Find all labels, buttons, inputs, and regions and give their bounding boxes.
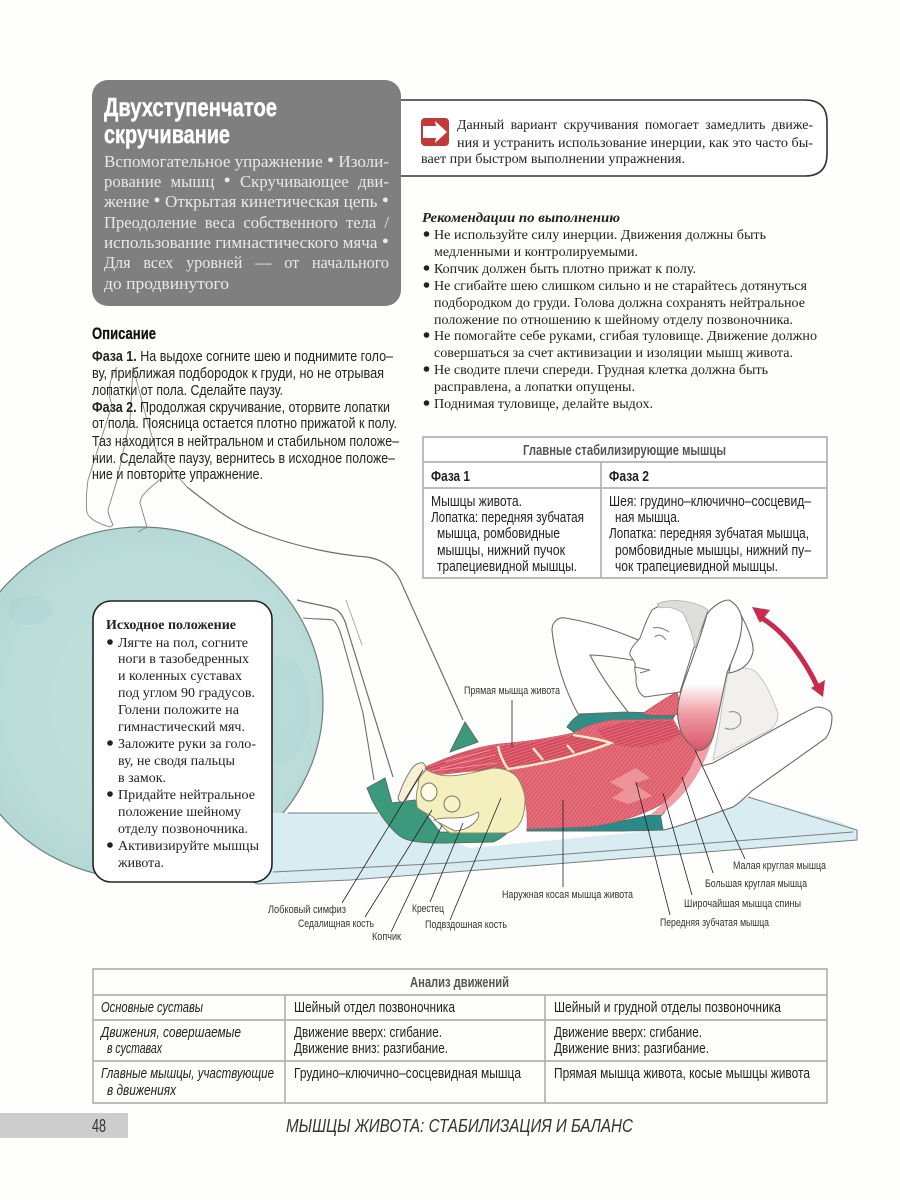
panel: exercise header: до продвинутого: [104, 274, 229, 293]
table: main stabilizing muscles: Лопатка: передняя зубчатая: [431, 509, 584, 526]
raised near arm: [678, 600, 753, 750]
anatomy labels: Копчик: [372, 931, 401, 943]
table: movement analysis: в движениях: [107, 1082, 176, 1099]
table: movement analysis: Прямая мышца живота, косые мышцы живота: [554, 1065, 811, 1082]
callout: tempo note: [401, 100, 827, 176]
anatomy labels: [268, 685, 827, 943]
exercise mat: [250, 797, 857, 884]
callout: tempo note: вает при быстром выполнении упражнения.: [421, 152, 685, 167]
table: main stabilizing muscles: Фаза 1: [431, 468, 470, 485]
description section: ву, приближая подбородок к груди, но не отрывая: [92, 365, 384, 382]
anatomy labels: Крестец: [412, 903, 445, 915]
execution recommendations: Не используйте силу инерции. Движения должны быть: [434, 228, 766, 243]
lower arm and resting head: [658, 668, 832, 830]
table: main stabilizing muscles: мышцы, нижний пучок: [437, 542, 565, 559]
description section: [92, 324, 400, 483]
torso muscles: [423, 719, 713, 829]
table: movement analysis: в суставах: [107, 1040, 162, 1057]
table: main stabilizing muscles: ная мышца.: [615, 509, 680, 526]
callout: starting position: Заложите руки за голо-: [118, 737, 256, 752]
gymnastic ball: [0, 527, 323, 879]
page number tab: 48: [92, 1116, 106, 1136]
description section: лопатки от пола. Сделайте паузу.: [92, 382, 283, 399]
description section: от пола. Поясница остается плотно прижатой к полу.: [92, 415, 397, 432]
anatomy labels: Прямая мышца живота: [464, 685, 561, 697]
table: movement analysis: Движение вниз: разгибание.: [554, 1040, 709, 1057]
table: movement analysis: [93, 969, 827, 1103]
execution recommendations: Не сводите плечи спереди. Грудная клетка должна быть: [434, 363, 768, 378]
callout: starting position: Придайте нейтральное: [118, 788, 255, 803]
callout: starting position: Исходное положение: [106, 618, 236, 633]
panel: exercise header: скручивание: [104, 119, 230, 149]
table: main stabilizing muscles: Фаза 2: [609, 468, 649, 485]
panel: exercise header: жение • Открытая кинетическая цепь •: [103, 190, 389, 212]
far arm behind head: [552, 618, 638, 714]
table: movement analysis: Движения, совершаемые: [99, 1024, 241, 1041]
callout: starting position: ву, не сводя пальцы: [118, 754, 236, 769]
panel: exercise header: использование гимнастического мяча •: [104, 231, 389, 253]
table: movement analysis: Грудино–ключично–сосцевидная мышца: [294, 1065, 522, 1082]
description section: Описание: [92, 324, 156, 343]
execution recommendations: подбородком до груди. Голова должна сохранять нейтральное: [434, 296, 805, 311]
panel: exercise header: Двухступенчатое: [104, 92, 277, 122]
callout: starting position: и коленных суставах: [118, 669, 242, 684]
anatomy labels: Большая круглая мышца: [705, 878, 808, 890]
table: movement analysis: Шейный и грудной отделы позвоночника: [554, 999, 782, 1016]
face and hair: [630, 601, 708, 697]
execution recommendations: Копчик должен быть плотно прижат к полу.: [434, 262, 696, 277]
callout: tempo note: ния и устранить использование инерции, как это часто бы-: [457, 136, 813, 151]
red movement arrow: [752, 607, 825, 697]
panel: exercise header: Для всех уровней — от начального: [104, 253, 389, 272]
table: main stabilizing muscles: трапециевидной мышцы.: [437, 558, 577, 575]
callout: starting position: ноги в тазобедренных: [118, 652, 249, 667]
anatomy leader lines: [342, 700, 745, 932]
callout: starting position: живота.: [117, 856, 164, 871]
shorts: [367, 712, 675, 843]
anatomy labels: Подвздошная кость: [425, 919, 507, 931]
neck muscle: [642, 692, 682, 716]
pelvis bones: [416, 768, 525, 833]
callout: starting position: Активизируйте мышцы: [118, 839, 260, 854]
legs resting on ball: [86, 367, 463, 780]
execution recommendations: медленными и контролируемыми.: [434, 245, 638, 260]
callout: starting position: под углом 90 градусов.: [118, 686, 255, 701]
description section: ние и повторите упражнение.: [92, 466, 263, 483]
description section: Фаза 2. Продолжая скручивание, оторвите лопатки: [92, 399, 390, 416]
table: main stabilizing muscles: мышца, ромбовидные: [437, 525, 560, 542]
page number tab: [0, 1113, 128, 1138]
anatomy labels: Передняя зубчатая мышца: [660, 917, 770, 929]
table: main stabilizing muscles: Лопатка: передняя зубчатая мышца,: [609, 525, 809, 542]
table: main stabilizing muscles: [423, 437, 827, 578]
callout: starting position: отделу позвоночника.: [118, 822, 248, 837]
callout: starting position: Лягте на пол, согните: [118, 636, 248, 651]
table: movement analysis: Шейный отдел позвоночника: [294, 999, 456, 1016]
anatomy labels: Широчайшая мышца спины: [684, 898, 801, 910]
callout: starting position: гимнастический мяч.: [118, 720, 245, 735]
description section: Таз находится в нейтральном и стабильном положе–: [92, 433, 400, 450]
execution recommendations: Не помогайте себе руками, сгибая туловище. Движение должно: [434, 329, 817, 344]
anatomy labels: Лобковый симфиз: [268, 904, 346, 916]
panel: exercise header: Преодоление веса собственного тела /: [104, 213, 389, 232]
panel: exercise header: [92, 80, 401, 306]
anatomy labels: Седалищная кость: [298, 918, 374, 930]
table: main stabilizing muscles: чок трапециевидной мышцы.: [615, 558, 778, 575]
table: main stabilizing muscles: Мышцы живота.: [431, 493, 522, 510]
execution recommendations: [422, 211, 817, 412]
description section: Фаза 1. На выдохе согните шею и поднимите голо–: [92, 348, 394, 365]
table: movement analysis: Главные мышцы, участвующие: [101, 1065, 274, 1082]
description section: нии. Сделайте паузу, вернитесь в исходное положе–: [92, 450, 396, 467]
anatomy labels: Малая круглая мышца: [733, 860, 827, 872]
execution recommendations: Не сгибайте шею слишком сильно и не старайтесь дотянуться: [434, 279, 808, 294]
table: main stabilizing muscles: Шея: грудино–ключично–сосцевид–: [609, 493, 812, 510]
execution recommendations: Поднимая туловище, делайте выдох.: [434, 397, 653, 412]
execution recommendations: Рекомендации по выполнению: [422, 211, 620, 226]
hand on pelvis: [398, 763, 426, 802]
callout: starting position: [93, 601, 272, 882]
execution recommendations: совершаться за счет активизации и изоляции мышц живота.: [434, 346, 793, 361]
table: main stabilizing muscles: Главные стабилизирующие мышцы: [523, 443, 726, 459]
icon: red arrow: [421, 118, 449, 146]
callout: starting position: Голени положите на: [118, 703, 240, 718]
panel: exercise header: рование мышц • Скручивающее дви-: [104, 170, 389, 192]
execution recommendations: расправлена, а лопатки опущены.: [434, 380, 635, 395]
anatomy labels: Наружная косая мышца живота: [502, 889, 634, 901]
table: main stabilizing muscles: ромбовидные мышцы, нижний пу–: [615, 542, 812, 559]
table: movement analysis: Основные суставы: [101, 999, 203, 1016]
table: movement analysis: Движение вверх: сгибание.: [554, 1024, 702, 1041]
callout: starting position: в замок.: [118, 771, 166, 786]
chapter footer title: МЫШЦЫ ЖИВОТА: СТАБИЛИЗАЦИЯ И БАЛАНС: [286, 1116, 634, 1136]
panel: exercise header: Вспомогательное упражнение • Изоли-: [104, 150, 389, 172]
execution recommendations: положение по отношению к шейному отделу позвоночника.: [434, 313, 793, 328]
table: movement analysis: Движение вверх: сгибание.: [294, 1024, 442, 1041]
callout: starting position: положение шейному: [118, 805, 241, 820]
callout: tempo note: Данный вариант скручивания помогает замедлить движе-: [457, 118, 813, 133]
table: movement analysis: Движение вниз: разгибание.: [294, 1040, 448, 1057]
table: movement analysis: Анализ движений: [410, 975, 509, 991]
